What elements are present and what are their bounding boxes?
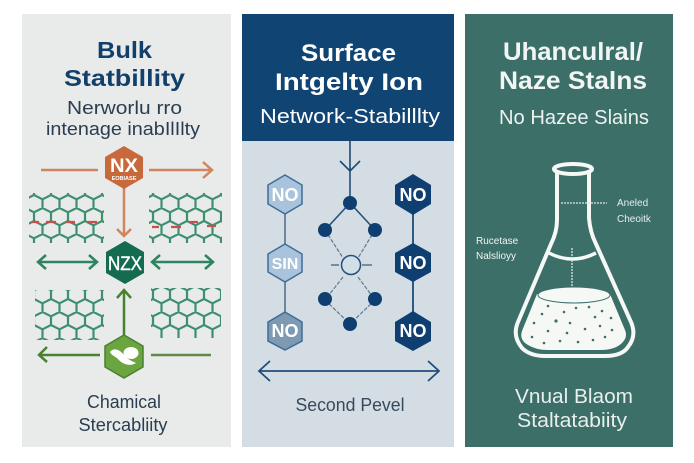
subheading line 2: intenage inabIlIlty <box>46 118 201 139</box>
subheading line 1: Nerworlu rro <box>67 97 182 118</box>
label: aneled cheoitk: Aneled <box>617 198 648 209</box>
arrow: double horizontal <box>259 361 439 381</box>
line: green right <box>151 354 211 356</box>
connector: left column <box>284 210 286 320</box>
icon: flask <box>516 164 633 356</box>
icon: NO dark hexagon top <box>395 174 431 215</box>
icon: SIN hexagon <box>268 244 302 282</box>
icon: NO dark hexagon middle <box>395 243 431 282</box>
heading line 2: Statbillity <box>64 65 185 91</box>
arrow: green up <box>117 290 131 335</box>
caption line 2: Stercabliity <box>78 415 168 435</box>
icon: NO muted hexagon <box>268 312 302 350</box>
arrow: green right double <box>152 255 213 269</box>
icon: NZX hexagon: NZX <box>108 254 142 275</box>
arrow: green left double <box>38 255 97 269</box>
arrow: orange down <box>117 185 131 236</box>
caption line 1: Chamical <box>87 392 161 412</box>
icon: NO dark hexagon top: NO <box>400 185 426 205</box>
icon: NX hexagon <box>105 146 143 189</box>
lattice: lower right <box>151 288 221 338</box>
caption line 2: Staltatabiity <box>517 410 627 432</box>
dotted marker: neck <box>561 202 607 204</box>
icon: NO muted hexagon: NO <box>272 321 298 341</box>
connector: right column <box>412 210 414 320</box>
icon: NX hexagon: EOBIASE <box>112 176 137 182</box>
arrow: down <box>340 141 360 171</box>
dotted marker: body <box>571 248 573 286</box>
heading line 2: Intgelty Ion <box>275 69 423 96</box>
heading line 1: Surface <box>301 40 396 67</box>
icon: NO dark hexagon middle: NO <box>400 253 426 273</box>
network diagram <box>318 171 382 331</box>
panel: haze stains <box>465 14 673 447</box>
caption: Second Pevel <box>296 395 404 415</box>
arrow: orange right <box>149 162 212 178</box>
heading line 1: Uhanculral/ <box>503 38 643 66</box>
label: rucetase nalslioyy: Rucetase <box>476 236 519 247</box>
icon: NO dark hexagon bottom: NO <box>400 321 426 341</box>
heading line 2: Naze Stalns <box>499 67 647 95</box>
subheading: No Hazee Slains <box>499 107 649 129</box>
lattice: top right <box>149 193 222 243</box>
header band <box>242 14 454 141</box>
icon: NO dark hexagon bottom <box>395 311 431 351</box>
panel: bulk stability <box>22 14 231 447</box>
icon: NO light hexagon: NO <box>272 185 298 205</box>
arrow: green left <box>39 347 100 362</box>
label: rucetase nalslioyy: Nalslioyy <box>476 251 516 262</box>
label: aneled cheoitk <box>617 198 652 225</box>
lattice: top left <box>29 193 104 243</box>
icon: chemical hexagon <box>105 335 143 378</box>
label: aneled cheoitk: Cheoitk <box>617 214 652 225</box>
icon: NO light hexagon <box>268 175 302 214</box>
icon: NX hexagon: NX <box>110 156 138 177</box>
icon: NZX hexagon <box>106 241 144 284</box>
panel: surface integrity <box>242 14 454 447</box>
arrow: orange left line <box>41 169 98 171</box>
caption line 1: Vnual Blaom <box>515 386 633 408</box>
icon: SIN hexagon: SIN <box>272 256 298 273</box>
label: rucetase nalslioyy <box>476 236 519 262</box>
lattice: lower left <box>35 290 104 340</box>
subheading: Network-Stabilllty <box>260 106 440 128</box>
heading: bulk stability: Bulk <box>97 37 152 63</box>
